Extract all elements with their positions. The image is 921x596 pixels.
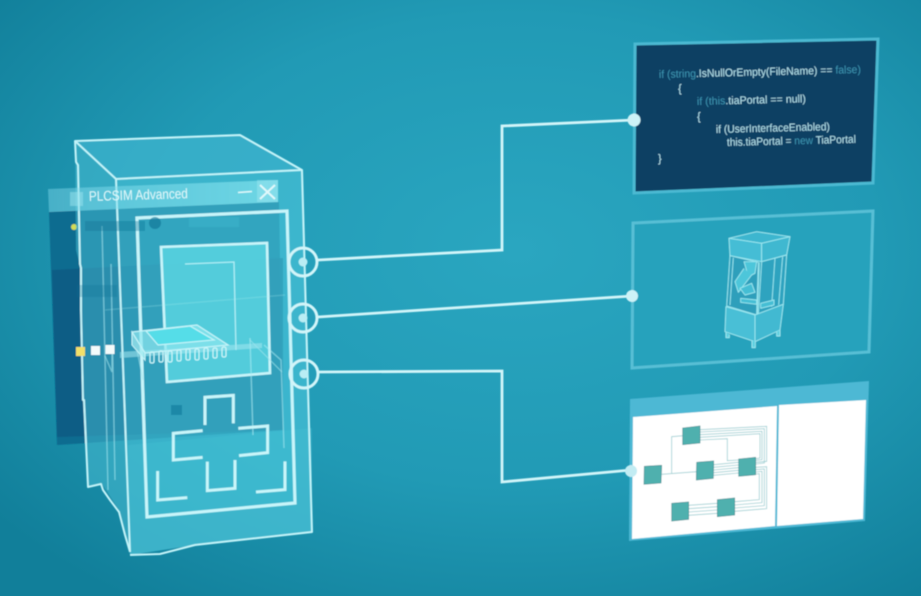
panel: PLC device xyxy=(75,135,312,555)
window title bar xyxy=(48,180,278,212)
device outline xyxy=(75,135,312,555)
device front face xyxy=(116,170,312,555)
code text: this.tiaPortal = new TiaPortal xyxy=(727,134,856,149)
d-pad icon xyxy=(158,395,285,500)
icon: connector port bottom xyxy=(290,360,318,388)
diagram wires xyxy=(662,426,767,515)
icon: connector port top xyxy=(289,248,317,276)
panel: logic diagram xyxy=(625,381,869,541)
code text: } xyxy=(658,153,662,165)
device left face xyxy=(75,141,130,555)
device inner screen xyxy=(161,243,270,382)
icon: connector port middle xyxy=(289,304,317,332)
connector dot xyxy=(628,114,640,126)
panel: software window behind device xyxy=(49,202,283,445)
screen inner lines xyxy=(102,226,285,490)
diagram blocks xyxy=(644,426,756,521)
panel: code xyxy=(628,39,878,193)
device top face xyxy=(75,135,302,179)
code text: if (UserInterfaceEnabled) xyxy=(716,121,830,136)
chip xyxy=(105,325,282,380)
panel: machine xyxy=(626,211,873,368)
window title: PLCSIM Advanced xyxy=(89,185,188,204)
connector: top to code panel xyxy=(318,120,634,260)
icon: window minimise and close xyxy=(238,180,278,202)
connector dot xyxy=(626,290,638,302)
code text: if (string.IsNullOrEmpty(FileName) == false) xyxy=(659,64,861,81)
icon: status light xyxy=(71,224,77,230)
code text: { xyxy=(678,83,682,95)
code text: if (this.tiaPortal == null) xyxy=(697,93,806,108)
horizontal bus xyxy=(120,343,262,358)
connector: bottom to diagram panel xyxy=(318,371,631,482)
rail brackets xyxy=(105,340,282,380)
code text: { xyxy=(697,111,701,123)
ghost window controls xyxy=(77,217,239,415)
chip pins xyxy=(150,347,226,363)
code text xyxy=(658,64,861,165)
icon: robot cell machine xyxy=(725,232,790,348)
progress squares xyxy=(76,345,114,356)
connector: middle to machine panel xyxy=(318,296,632,317)
connector dot xyxy=(625,465,637,477)
device inner frame xyxy=(137,211,295,517)
